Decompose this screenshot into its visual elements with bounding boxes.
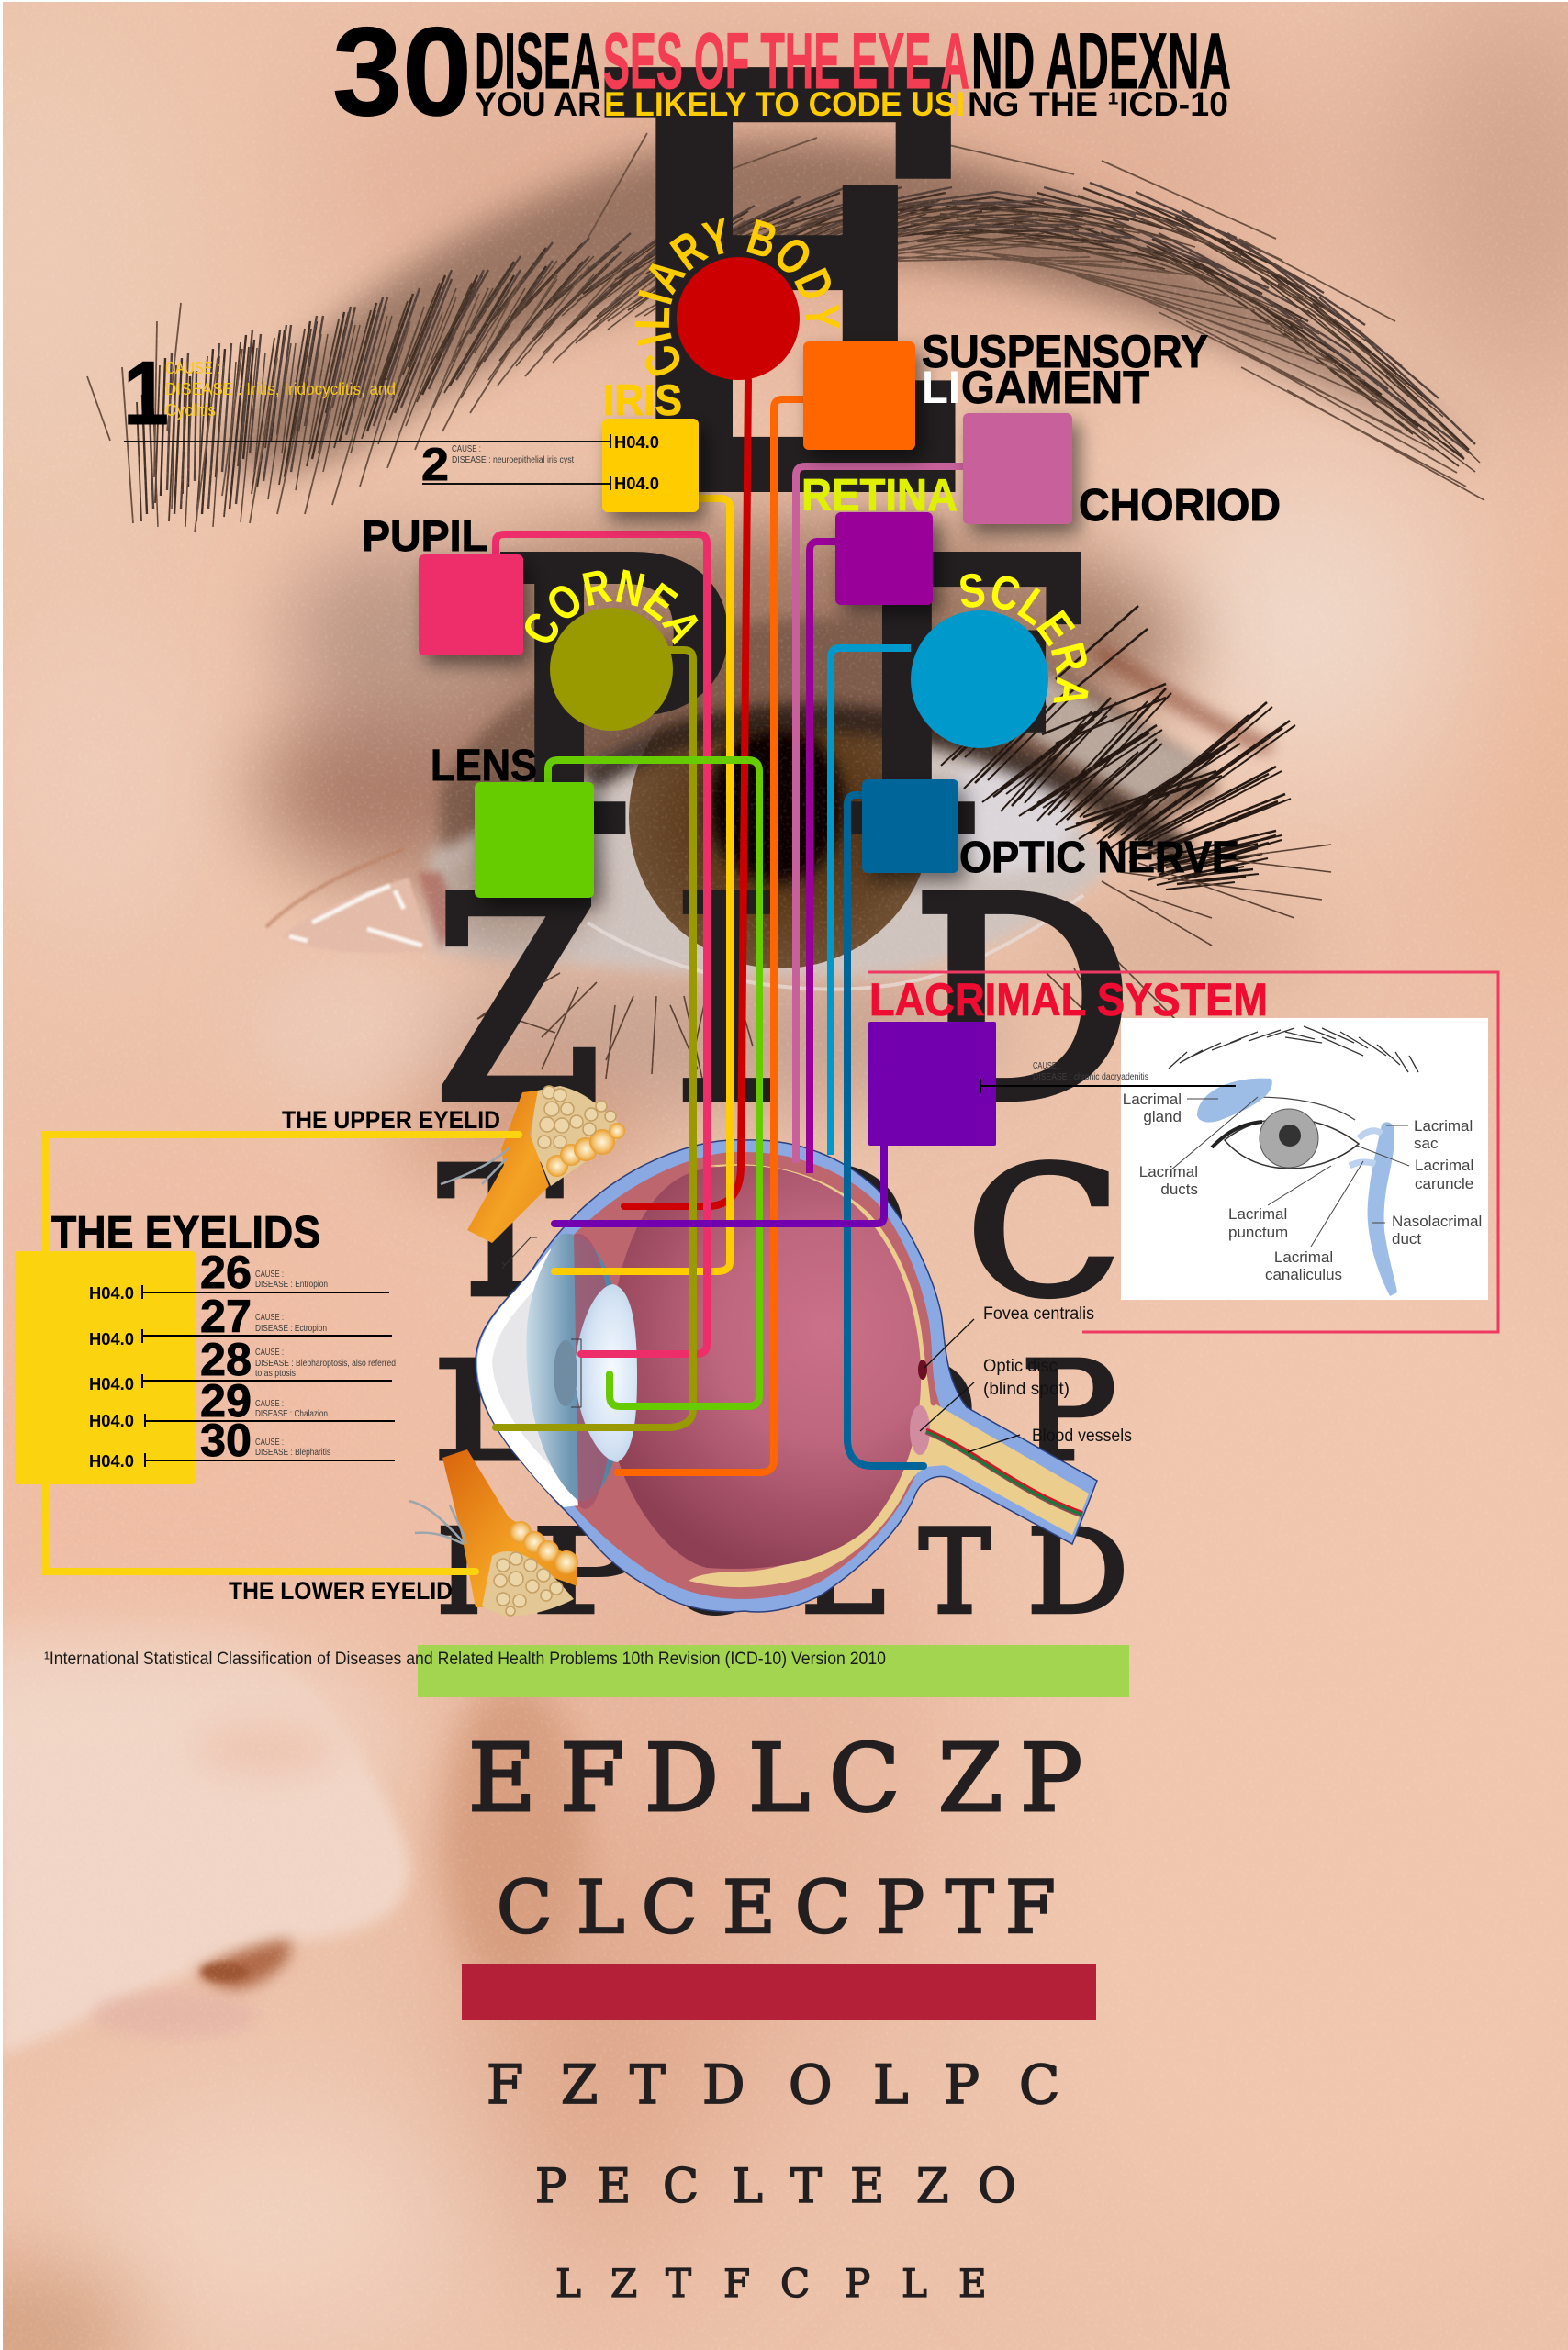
- chart row 3: Z: [435, 841, 600, 1163]
- labels: gland: [1143, 1108, 1182, 1125]
- panel: lacrimal diagram: [1121, 1018, 1488, 1300]
- disease 30: CAUSE :: [255, 1438, 284, 1448]
- node: retina: RETINA: [801, 471, 958, 520]
- line: optic nerve: [847, 795, 924, 1466]
- chart row 2: [487, 485, 1090, 914]
- labels: Nasolacrimal: [1392, 1213, 1482, 1230]
- disease 30: DISEASE : Blepharitis: [255, 1448, 330, 1458]
- node: suspensory ligament: GAMENT: [961, 362, 1149, 413]
- labels: sac: [1414, 1135, 1439, 1152]
- leader lines: [1170, 1097, 1409, 1247]
- disease 2: H04.0: [614, 475, 659, 493]
- lacrimal eye: [1225, 1118, 1359, 1169]
- labels: punctum: [1228, 1224, 1288, 1241]
- disease 26: CAUSE :: [255, 1270, 284, 1280]
- node: optic nerve: [862, 779, 1239, 882]
- node: iris: IRIS: [603, 375, 682, 424]
- node: optic nerve: OPTIC NERVE: [959, 834, 1239, 882]
- title number: 30: [332, 2, 472, 142]
- disease 28: to as ptosis: [255, 1369, 296, 1379]
- diagram labels: Blood vessels: [1032, 1427, 1132, 1446]
- disease 27: 27: [200, 1291, 252, 1342]
- disease 2: 2: [421, 439, 449, 490]
- upper eyelid label: THE UPPER EYELID: [282, 1106, 500, 1134]
- chart row 2: F: [834, 485, 1090, 914]
- disease 1: [123, 342, 659, 452]
- chart row 6: T: [919, 1505, 991, 1639]
- disease 29: [89, 1375, 395, 1430]
- chart row 6: O: [664, 1505, 768, 1639]
- choroid layer: [574, 1152, 946, 1599]
- node: suspensory ligament: [803, 326, 1208, 450]
- disease 27: [89, 1291, 392, 1348]
- node: sclera: [911, 573, 1089, 748]
- lens: [575, 1284, 637, 1462]
- panel: lacrimal frame: [868, 972, 1498, 1332]
- line: ciliary body: [624, 380, 748, 1206]
- chart row 5: P: [1021, 1332, 1116, 1491]
- node: ciliary body: CILIARY BODY: [635, 218, 840, 376]
- disease 30: H04.0: [89, 1452, 134, 1471]
- disease 26: DISEASE : Entropion: [255, 1280, 328, 1290]
- labels: Lacrimal: [1228, 1205, 1287, 1223]
- lower eyelid label: THE LOWER EYELID: [229, 1577, 453, 1605]
- disease 28: H04.0: [89, 1375, 134, 1393]
- disease 26: [89, 1247, 389, 1303]
- line: lens: [548, 760, 759, 1406]
- chart row 4: T: [439, 1130, 562, 1336]
- chart row 5: [432, 1332, 1116, 1491]
- chart row 10: PECLTEZO: [535, 2160, 1016, 2214]
- blood vessels: [926, 1431, 1082, 1515]
- disease 29: 29: [200, 1375, 252, 1427]
- node: lacrimal system: DISEASE : chronic dacryadenitis: [1033, 1072, 1148, 1082]
- chart row 5: L: [432, 1334, 554, 1491]
- diagram labels: [983, 1304, 1132, 1446]
- disease 2: [421, 439, 659, 493]
- nose: [0, 1616, 588, 2350]
- node: lacrimal system: [868, 974, 1268, 1146]
- disease 2: DISEASE : neuroepithelial iris cyst: [452, 455, 574, 465]
- chart row 6: L: [801, 1505, 885, 1639]
- labels: Lacrimal: [1414, 1117, 1473, 1135]
- optic disc: [910, 1405, 930, 1455]
- labels: Lacrimal: [1274, 1248, 1333, 1266]
- node: pupil: [362, 511, 523, 655]
- chart row 5: D: [858, 1333, 978, 1491]
- disease 1: Cyclitis: [165, 401, 216, 420]
- line: suspensory ligament: [618, 399, 803, 1472]
- chart row 3: D: [912, 841, 1134, 1163]
- chart row 2: P: [487, 485, 734, 914]
- title line 2: E LIKELY TO CODE USI: [604, 85, 965, 123]
- chart row 6: D: [1026, 1505, 1129, 1639]
- upper lid: [441, 618, 1221, 849]
- disease 28: CAUSE :: [255, 1348, 284, 1358]
- disease 1: H04.0: [614, 433, 659, 452]
- retinal interior: [609, 1166, 921, 1569]
- chart row 8: CLCECPTF: [497, 1865, 1056, 1950]
- node: iris: [602, 375, 699, 512]
- disease 26: H04.0: [89, 1284, 134, 1303]
- disease 1: CAUSE :: [165, 359, 220, 377]
- nasolacrimal duct: [1368, 1122, 1397, 1296]
- disease 28: [89, 1334, 396, 1393]
- iris stub: [554, 1340, 577, 1406]
- node: suspensory ligament: SUSPENSORY: [922, 326, 1208, 377]
- chart row 3: [435, 841, 1134, 1163]
- labels: [1123, 1091, 1482, 1283]
- diagram labels: (blind spot): [983, 1380, 1070, 1399]
- title line 2: NG THE ¹ICD-10: [968, 85, 1228, 123]
- disease 30: 30: [200, 1415, 252, 1466]
- labels: Lacrimal: [1415, 1157, 1473, 1174]
- line: eyelid upper: [45, 1135, 519, 1251]
- labels: canaliculus: [1265, 1266, 1342, 1283]
- lower eyelid gland: [409, 1449, 578, 1616]
- title line 2: [475, 85, 1228, 123]
- disease 29: CAUSE :: [255, 1399, 284, 1409]
- line: retina: [810, 542, 835, 1173]
- chart row 4: D: [742, 1131, 911, 1336]
- eye chart letters: [432, 0, 1134, 2306]
- tear duct: [283, 878, 431, 953]
- connector lines: [45, 380, 963, 1572]
- retina layer and optic nerve: [689, 1164, 1089, 1587]
- line: sclera: [831, 648, 911, 1155]
- eyebrow: [87, 133, 1484, 532]
- title line 1: SES OF THE EYE A: [603, 17, 969, 106]
- node: cornea: [525, 569, 698, 731]
- panel: eyelids: [15, 1106, 500, 1605]
- diagram labels: Fovea centralis: [983, 1304, 1094, 1324]
- line: cornea: [496, 650, 693, 1427]
- disease 27: H04.0: [89, 1330, 134, 1348]
- eyelids box: [15, 1251, 195, 1484]
- node: lacrimal system: CAUSE :: [1033, 1061, 1060, 1071]
- anterior chamber: [526, 1234, 624, 1501]
- chart row 7: EFDLCZP: [468, 1724, 1082, 1832]
- diagram labels: Optic disc: [983, 1357, 1058, 1376]
- eyelids heading: THE EYELIDS: [51, 1208, 320, 1258]
- labels: caruncle: [1415, 1175, 1473, 1192]
- disease 27: DISEASE : Ectropion: [255, 1324, 327, 1334]
- chart row 4: [439, 1130, 1121, 1336]
- line: choroid: [796, 466, 963, 1163]
- node: cornea: CORNEA: [525, 569, 698, 645]
- labels: ducts: [1160, 1181, 1198, 1198]
- sclera outer: [476, 1140, 1097, 1612]
- disease 28: 28: [200, 1334, 252, 1385]
- eye: [266, 618, 1271, 990]
- labels: Lacrimal: [1123, 1091, 1182, 1108]
- lacrimal brow: [1169, 1026, 1418, 1072]
- chart row 9: FZTDOLPC: [487, 2053, 1059, 2116]
- line: pupil: [496, 534, 707, 1354]
- line: eyelid lower: [45, 1484, 476, 1572]
- lacrimal gland: [1197, 1079, 1272, 1123]
- title: [332, 2, 1231, 142]
- disease 27: CAUSE :: [255, 1313, 284, 1323]
- title line 1: ND ADEXNA: [971, 17, 1231, 106]
- node: choroid: [963, 413, 1281, 531]
- node: retina: [801, 471, 958, 605]
- disease 1: 1: [123, 342, 169, 443]
- eye anatomy diagram: [476, 1140, 1132, 1612]
- fovea: [918, 1360, 927, 1380]
- green bar: [418, 1645, 1129, 1697]
- chart row 6: [436, 1505, 1129, 1640]
- chart row 6: I: [436, 1505, 482, 1639]
- node: choroid: CHORIOD: [1079, 481, 1281, 531]
- leader lines: [920, 1319, 1020, 1452]
- title line 1: DISEA: [475, 17, 600, 106]
- node: sclera: SCLERA: [960, 573, 1089, 703]
- node: lacrimal system: LACRIMAL SYSTEM: [869, 974, 1268, 1025]
- line: lacrimal: [554, 1146, 884, 1224]
- labels: Lacrimal: [1139, 1163, 1198, 1181]
- line: iris: [554, 498, 730, 1271]
- footnote: ¹International Statistical Classification of Diseases and Related Health Problems 10th Revision (ICD-10) Version 2010: [44, 1650, 886, 1669]
- red bar: [462, 1964, 1096, 2020]
- title line 2: YOU AR: [475, 85, 601, 123]
- chart row 4: C: [967, 1130, 1121, 1335]
- disease 29: H04.0: [89, 1412, 134, 1430]
- disease 26: 26: [200, 1247, 252, 1298]
- disease 29: DISEASE : Chalazion: [255, 1409, 328, 1419]
- disease 30: [89, 1415, 395, 1471]
- chart row 11: LZTFCPLE: [555, 2261, 987, 2306]
- disease 1: DISEASE : Iritis, Iridocyclitis, and: [165, 380, 396, 398]
- node: suspensory ligament: LI: [922, 362, 960, 413]
- white cornea: [477, 1248, 578, 1507]
- node: lens: LENS: [431, 742, 537, 790]
- disease 2: CAUSE :: [452, 444, 481, 454]
- chart row 3: I: [672, 841, 782, 1163]
- eyelashes: [477, 606, 1331, 1079]
- labels: duct: [1392, 1230, 1421, 1248]
- chart row 6: P: [532, 1505, 644, 1640]
- node: pupil: PUPIL: [362, 511, 487, 560]
- node: lens: [431, 742, 594, 898]
- upper eyelid gland: [441, 1086, 625, 1243]
- disease 28: DISEASE : Blepharoptosis, also referred: [255, 1359, 396, 1369]
